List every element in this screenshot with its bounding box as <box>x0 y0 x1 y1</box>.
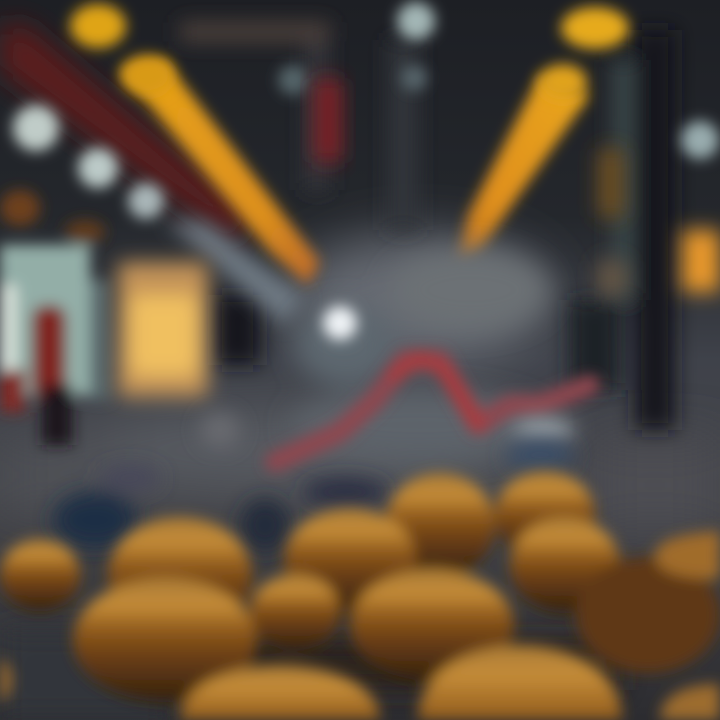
small light patch by chart <box>200 412 575 448</box>
right yellow beam <box>458 75 590 262</box>
glowing amber poster <box>118 262 208 397</box>
grey diagonal band left <box>165 220 305 325</box>
central white light <box>323 306 357 340</box>
red hanging banner <box>314 78 342 163</box>
hanging lamps <box>70 4 629 100</box>
red line chart <box>275 358 590 462</box>
left yellow beam <box>120 60 320 285</box>
gold mounds <box>0 471 720 720</box>
red diagonal beam top left <box>0 25 250 245</box>
grey haze around the chart <box>290 250 550 460</box>
round white lights <box>13 2 719 219</box>
blue-grey shapes behind the gold <box>53 439 575 551</box>
right amber window <box>597 148 720 296</box>
floor shadows <box>0 630 620 720</box>
left storefront <box>0 190 110 445</box>
central haze <box>0 235 720 530</box>
dark structural columns <box>180 22 675 430</box>
